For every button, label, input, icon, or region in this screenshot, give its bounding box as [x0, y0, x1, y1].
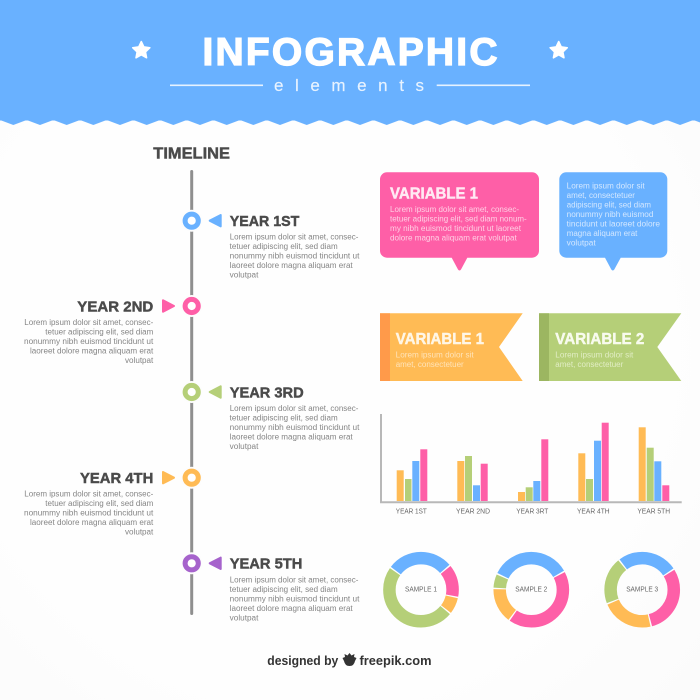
bars: year 2nd [457, 456, 488, 501]
ribbon text: amet, consectetuer [555, 360, 624, 369]
bubble text: magna aliquam erat [567, 229, 638, 238]
chart labels: YEAR 5TH [637, 508, 670, 516]
donut label: SAMPLE 3 [626, 586, 658, 593]
bubble text: tincidunt ut laoreet dolore [567, 220, 661, 229]
ribbon strip [539, 313, 549, 381]
description: tetuer adipiscing elit, sed diam [230, 242, 338, 251]
bar chart [381, 414, 682, 516]
description [230, 404, 360, 451]
timeline item: year 5th [181, 552, 360, 622]
chart labels: YEAR 4TH [577, 508, 610, 516]
bars: year 5th [639, 427, 669, 501]
footer credit: designed by [267, 654, 338, 668]
marker [181, 467, 203, 489]
ribbon text: Lorem ipsum dolor sit [555, 351, 634, 360]
description: volutpat [230, 613, 259, 622]
bubble text [390, 205, 527, 242]
icon: freepik logo [342, 653, 356, 666]
panel: green ribbon [539, 313, 681, 381]
timeline item: year 2nd [24, 295, 203, 365]
description [230, 575, 360, 622]
description: tetuer adipiscing elit, sed diam [45, 328, 154, 336]
timeline item: year 3rd [181, 381, 360, 451]
bubble text: my nibh euismod tincidunt ut laoreet [390, 224, 522, 233]
description: volutpat [230, 442, 259, 451]
marker [181, 210, 203, 232]
arrow [210, 558, 221, 569]
heading: YEAR 3RD [230, 384, 304, 401]
description [24, 318, 154, 365]
description: tetuer adipiscing elit, sed diam [230, 585, 338, 594]
chart labels: YEAR 1ST [396, 508, 427, 516]
description: nonummy nibh euismod tincidunt ut [230, 423, 360, 432]
timeline axis [190, 170, 193, 615]
arrow [210, 386, 221, 398]
bubble text: nonummy nibh euismod [567, 210, 653, 219]
arrow [163, 300, 174, 312]
ribbon text: amet, consectetuer [396, 360, 464, 369]
description: tetuer adipiscing elit, sed diam [230, 414, 338, 422]
chart labels: YEAR 3RT [516, 508, 549, 516]
bubble text: Lorem ipsum dolor sit amet, consec- [390, 205, 519, 214]
bubble text [567, 182, 661, 248]
description: Lorem ipsum dolor sit amet, consec- [230, 233, 359, 242]
description: Lorem ipsum dolor sit amet, consec- [230, 404, 359, 413]
description: volutpat [125, 528, 154, 537]
bubble text: amet, consectetuer [567, 191, 635, 200]
marker [181, 381, 203, 403]
description: nonummy nibh euismod tincidunt ut [230, 252, 360, 261]
description [230, 233, 360, 280]
description: Lorem ipsum dolor sit amet, consec- [230, 575, 359, 584]
ribbon text [555, 351, 634, 369]
panel: pink speech bubble [380, 172, 539, 270]
timeline item: year 1st [181, 210, 360, 280]
bubble text: volutpat [567, 239, 596, 248]
heading: YEAR 4TH [80, 470, 153, 487]
ribbon text: Lorem ipsum dolor sit [396, 351, 474, 360]
ribbon text [396, 351, 474, 369]
arrow [210, 215, 221, 226]
bubble text: dolore magna aliquam erat volutpat [390, 234, 517, 242]
marker [181, 295, 203, 317]
description: tetuer adipiscing elit, sed diam [45, 499, 154, 508]
bubble text: adipiscing elit, sed diam [567, 201, 651, 210]
timeline [24, 145, 360, 622]
icon: star right [550, 42, 567, 58]
footer credit [267, 653, 432, 668]
donut label: SAMPLE 1 [405, 586, 437, 593]
footer credit: freepik.com [360, 654, 432, 668]
heading: YEAR 2ND [77, 298, 153, 315]
heading: YEAR 1ST [230, 213, 299, 230]
marker [181, 552, 203, 574]
ribbon heading: VARIABLE 2 [555, 331, 644, 348]
subtitle rule right [437, 84, 530, 86]
description: Lorem ipsum dolor sit amet, consec- [24, 318, 154, 327]
description: nonummy nibh euismod tincidunt ut [24, 337, 154, 346]
panel: orange ribbon [380, 313, 523, 381]
description: laoreet dolore magna aliquam erat [230, 432, 353, 442]
arrow [163, 472, 174, 483]
subtitle rule left [170, 84, 263, 86]
bars: year 3rt [518, 439, 548, 501]
donut chart: sample 2 [500, 558, 563, 621]
title: INFOGRAPHIC [202, 31, 498, 74]
description: Lorem ipsum dolor sit amet, consec- [24, 490, 154, 499]
bubble text: tetuer adipiscing elit, sed diam nonum- [390, 214, 527, 224]
description: laoreet dolore magna aliquam erat [230, 604, 353, 613]
description: volutpat [125, 356, 154, 365]
description: nonummy nibh euismod tincidunt ut [230, 594, 360, 603]
bubble text: Lorem ipsum dolor sit [567, 182, 645, 191]
icon: star left [133, 42, 150, 58]
bubble heading: VARIABLE 1 [390, 185, 478, 202]
bars: year 1st [397, 449, 427, 501]
header banner [0, 0, 700, 125]
timeline item: year 4th [24, 467, 203, 537]
panel: blue speech bubble [559, 172, 667, 270]
description: nonummy nibh euismod tincidunt ut [24, 509, 154, 518]
chart axes [381, 414, 682, 502]
description: laoreet dolore magna aliquam erat [230, 261, 353, 270]
chart labels: YEAR 2ND [456, 508, 490, 516]
description: volutpat [230, 271, 259, 280]
timeline heading: TIMELINE [153, 145, 230, 162]
donut chart: sample 3 [611, 558, 674, 621]
donut chart: sample 1 [389, 558, 453, 621]
ribbon heading: VARIABLE 1 [396, 331, 484, 348]
description: laoreet dolore magna aliquam erat [30, 346, 154, 356]
donut label: SAMPLE 2 [515, 586, 547, 593]
chart labels [396, 508, 670, 516]
bars: year 4th [578, 423, 609, 501]
heading: YEAR 5TH [230, 556, 302, 573]
ribbon strip [380, 313, 390, 381]
subtitle: elements [274, 76, 424, 95]
description [24, 490, 154, 537]
description: laoreet dolore magna aliquam erat [30, 518, 154, 527]
